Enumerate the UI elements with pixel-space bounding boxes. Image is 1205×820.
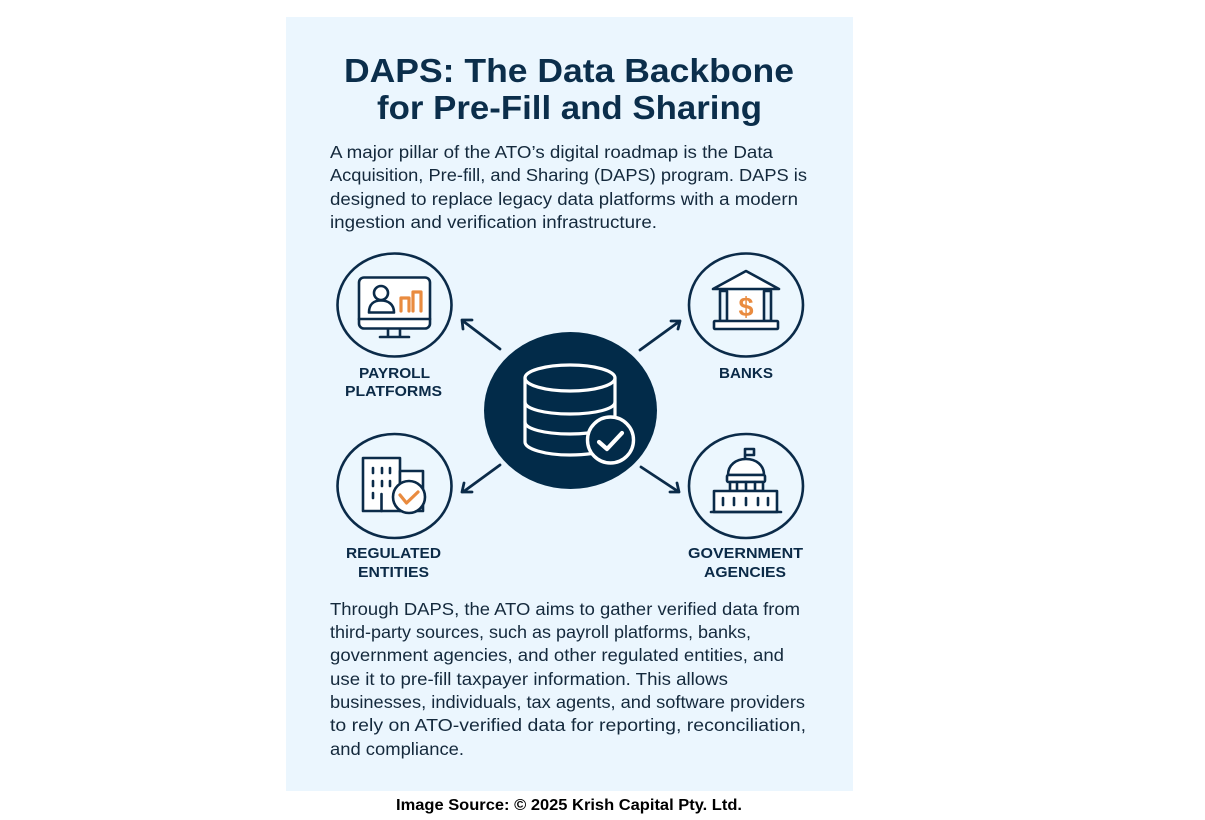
text block: explanation: use it to pre-fill taxpayer information. This allows [330,669,728,689]
icon: building with check badge [363,458,425,513]
arrow: to government agencies [641,467,679,492]
label: regulated entities: REGULATED [346,546,441,562]
icon: verified check badge [588,417,634,463]
node: payroll platforms [338,254,452,400]
central database circle [484,332,657,489]
label: payroll platforms: PLATFORMS [345,384,442,400]
arrow: to banks [640,321,680,350]
label: regulated entities: ENTITIES [358,565,429,581]
node: banks [689,254,803,382]
text block: explanation: and compliance. [330,739,464,759]
text block: introduction: Acquisition, Pre-fill, and Sharing (DAPS) program. DAPS is [330,165,807,185]
icon: monitor with person and bars [359,278,430,337]
label: payroll platforms [345,366,442,400]
label: payroll platforms: PAYROLL [359,366,430,382]
icon: bank with dollar sign: $ [738,292,754,322]
icon: capitol building [711,449,781,512]
icon: database [525,365,615,455]
text block: explanation: businesses, individuals, tax agents, and software providers [330,692,805,712]
image source caption: Image Source: © 2025 Krish Capital Pty. Ltd. [396,797,742,814]
text block: introduction [330,142,807,232]
panel: infographic background [286,17,853,791]
node: regulated entities [338,434,452,581]
label: government agencies: GOVERNMENT [688,546,803,562]
text block: explanation: Through DAPS, the ATO aims to gather verified data from [330,599,800,619]
text block: explanation: third-party sources, such as payroll platforms, banks, [330,622,751,642]
label: banks: BANKS [719,366,773,382]
arrow: to regulated entities [462,465,500,492]
text block: explanation [330,599,806,759]
text block: explanation: government agencies, and other regulated entities, and [330,645,784,665]
title: DAPS: The Data Backbone [344,52,794,89]
node: government agencies [688,434,803,581]
arrow: to payroll platforms [462,320,500,349]
text block: explanation: to rely on ATO-verified data for reporting, reconciliation, [330,715,806,735]
title [344,52,794,126]
label: government agencies [688,546,803,581]
label: government agencies: AGENCIES [704,565,786,581]
title: for Pre-Fill and Sharing [377,89,762,126]
text block: introduction: designed to replace legacy data platforms with a modern [330,189,798,209]
label: regulated entities [346,546,441,581]
text block: introduction: A major pillar of the ATO’s digital roadmap is the Data [330,142,773,162]
text block: introduction: ingestion and verification infrastructure. [330,212,657,232]
